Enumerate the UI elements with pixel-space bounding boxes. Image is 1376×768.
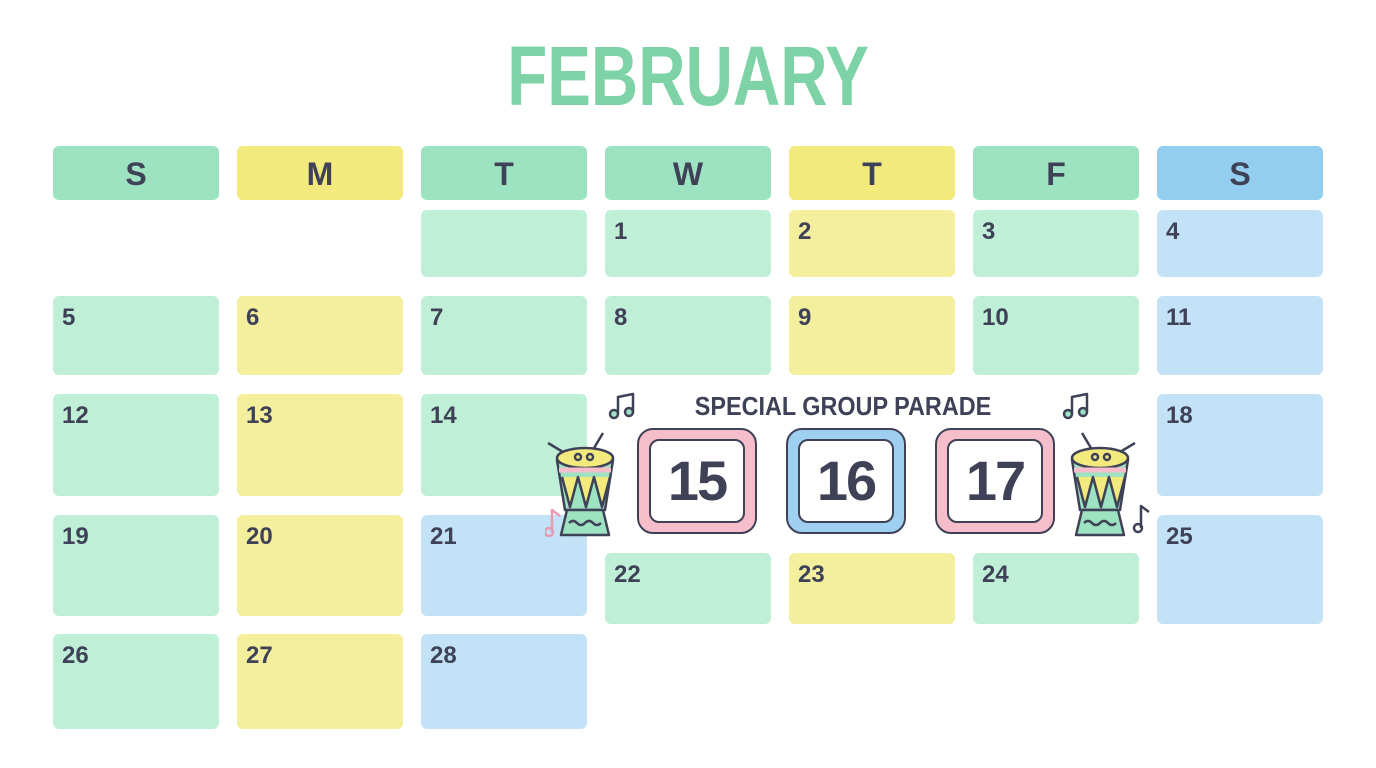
calendar days: 27 [246,642,273,669]
calendar days: 12 [62,402,89,429]
weekday headers: S [125,156,147,192]
calendar days: 6 [246,304,259,331]
box 16: 16 [817,449,875,512]
calendar days: 7 [430,304,443,331]
calendar days: 13 [246,402,273,429]
calendar days: 10 [982,304,1009,331]
icon: left drum [545,392,634,538]
weekday headers: T [494,156,514,192]
calendar days: 9 [798,304,811,331]
calendar days: 23 [798,561,825,588]
calendar days: 1 [614,218,627,245]
calendar days: 8 [614,304,627,331]
calendar days: 11 [1166,304,1191,331]
box 17: 17 [966,449,1024,512]
calendar days: 21 [430,523,457,550]
weekday headers: T [862,156,882,192]
calendar days: 26 [62,642,89,669]
calendar days: 18 [1166,402,1193,429]
calendar days: 3 [982,218,995,245]
parade callout [545,391,1150,538]
calendar days: 20 [246,523,273,550]
calendar days: 24 [982,561,1009,588]
weekday headers: M [307,156,333,192]
box 16 [786,428,906,534]
calendar days: 22 [614,561,641,588]
calendar days: 2 [798,218,811,245]
box 15 [637,428,757,534]
box 15: 15 [668,449,726,512]
calendar days: 25 [1166,523,1193,550]
title: FEBRUARY [507,29,869,123]
calendar days: 19 [62,523,89,550]
weekday headers: S [1229,156,1251,192]
calendar days: 5 [62,304,75,331]
icon: right drum [1062,392,1150,536]
box 17 [935,428,1055,534]
weekday headers: F [1046,156,1066,192]
calendar days: 14 [430,402,457,429]
parade heading: SPECIAL GROUP PARADE [695,391,991,421]
calendar days: 4 [1166,218,1179,245]
calendar days: 28 [430,642,457,669]
weekday headers: W [673,156,703,192]
weekday headers [53,146,1323,200]
